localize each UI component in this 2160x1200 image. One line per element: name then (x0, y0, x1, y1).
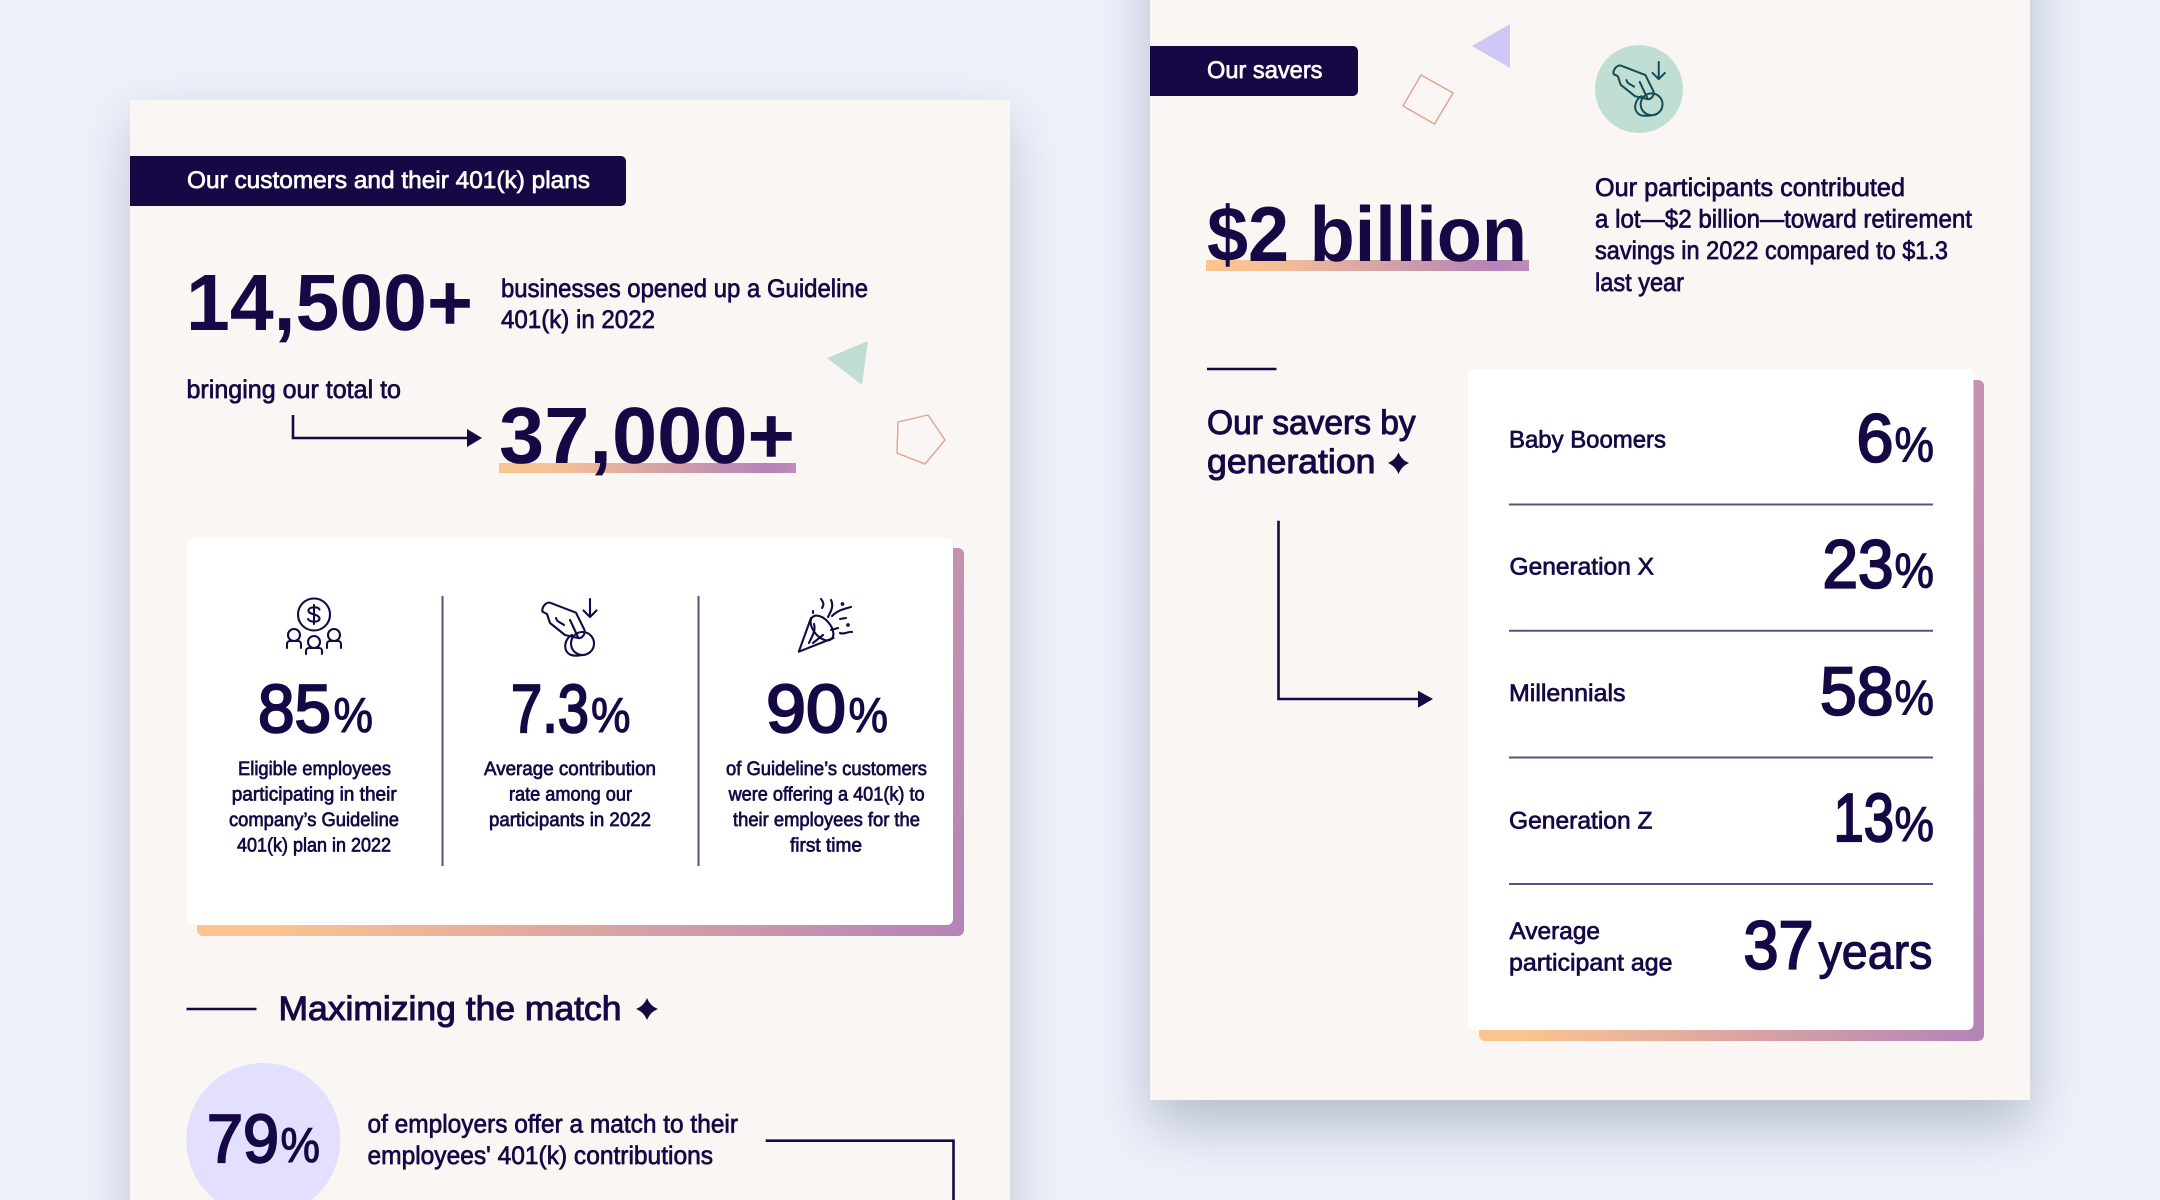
stat column: 90% (726, 599, 927, 857)
stat column: 90%: % (848, 689, 888, 743)
text: participants contributed: a lot—$2 billion—toward retirement (1595, 206, 1972, 234)
row: millennials 58%: 58 (1820, 653, 1894, 729)
row: average participant age 37 years: 37 (1744, 907, 1814, 983)
row: millennials 58% (1509, 653, 1934, 729)
stat: 79% of employers offer a match: of employers offer a match to their (368, 1110, 738, 1138)
section tag: savers (1150, 46, 1358, 96)
heading: our savers by generation (1207, 369, 1416, 481)
row: generation z 13%: Generation Z (1509, 807, 1652, 834)
stat column: 7.3%: participants in 2022 (489, 809, 651, 831)
row: baby boomers 6%: 6 (1856, 401, 1894, 477)
stat: 79% of employers offer a match (186, 1063, 738, 1200)
stat column: 85%: company’s Guideline (229, 809, 399, 831)
stat column: 85%: participating in their (232, 784, 397, 806)
row: millennials 58%: Millennials (1509, 680, 1626, 707)
text: participants contributed: Our participants contributed (1595, 174, 1905, 202)
stat column: 7.3%: 7.3 (511, 671, 589, 747)
heading: maximizing the match (186, 990, 658, 1028)
icon: hand dropping coin (542, 599, 596, 656)
panel: our customers and their 401(k) plans (130, 100, 1010, 1200)
row: baby boomers 6%: Baby Boomers (1509, 427, 1666, 454)
row: generation z 13%: 13 (1834, 780, 1894, 856)
text: participants contributed: savings in 2022 compared to $1.3 (1595, 237, 1948, 265)
stat column: 85%: 401(k) plan in 2022 (237, 835, 391, 857)
row: generation x 23% (1510, 527, 1934, 603)
panel: three key stats card (187, 538, 964, 936)
stat column: 90%: first time (790, 835, 862, 857)
heading: maximizing the match: Maximizing the match (278, 990, 622, 1028)
stat: 14,500+ businesses: businesses opened up a Guideline (501, 275, 868, 303)
section tag: customers (130, 156, 626, 206)
row: baby boomers 6% (1509, 401, 1934, 477)
stat column: 85% (229, 598, 399, 857)
text: bringing our total to: bringing our total to (186, 376, 401, 404)
panel: savers by generation card (1468, 369, 1984, 1041)
row: generation x 23%: % (1894, 545, 1934, 599)
stat column: 85%: Eligible employees (238, 758, 391, 780)
stat column: 7.3%: Average contribution (484, 758, 656, 780)
decoration: outline diamond (1403, 75, 1453, 124)
row: baby boomers 6%: % (1894, 419, 1934, 473)
row: average participant age 37 years: participant age (1509, 950, 1672, 977)
stat column: 7.3%: rate among our (509, 784, 632, 806)
stat column: 7.3% (484, 599, 656, 831)
decoration: outline pentagon (897, 415, 945, 464)
stat column: 90%: 90 (766, 671, 846, 747)
section tag: savers: Our savers (1207, 57, 1322, 84)
icon: people and dollar (287, 598, 341, 654)
stat: 37,000+ with gradient underline: 37,000+ (499, 391, 795, 480)
stat: 79% of employers offer a match: % (280, 1119, 320, 1173)
stat: 14,500+ businesses (186, 258, 868, 347)
stat: 14,500+ businesses: 401(k) in 2022 (501, 306, 655, 334)
row: millennials 58%: % (1894, 671, 1934, 725)
row: generation z 13% (1509, 780, 1934, 856)
text: participants contributed: last year (1595, 269, 1684, 297)
decoration: green triangle (827, 341, 868, 385)
connector line (766, 1141, 954, 1200)
icon: party popper (799, 599, 852, 652)
stat column: 85%: % (334, 689, 373, 743)
stat: $2 billion: $2 billion (1207, 190, 1527, 278)
text: participants contributed (1595, 174, 1972, 297)
row: generation z 13%: % (1894, 798, 1934, 852)
arrow: generation (1278, 521, 1433, 708)
row: generation x 23%: Generation X (1510, 553, 1654, 580)
icon: hand dropping coin in green circle (1595, 45, 1683, 133)
stat column: 90%: were offering a 401(k) to (728, 784, 925, 806)
stat column: 90%: their employees for the (733, 809, 920, 831)
row: generation x 23%: 23 (1822, 527, 1894, 603)
heading: our savers by generation: Our savers by (1207, 404, 1416, 442)
heading: our savers by generation: generation (1207, 443, 1376, 481)
row: average participant age 37 years: Average (1510, 918, 1600, 945)
stat: 14,500+ businesses: 14,500+ (186, 258, 473, 347)
stat column: 90%: of Guideline’s customers (726, 758, 927, 780)
decoration: lilac triangle (1472, 24, 1510, 68)
stat column: 85%: 85 (258, 671, 331, 747)
section tag: customers: Our customers and their 401(k) plans (187, 167, 590, 194)
row: average participant age 37 years (1509, 907, 1932, 983)
stat column: 7.3%: % (591, 689, 630, 743)
panel: our savers (1150, 0, 2030, 1100)
row: average participant age 37 years: years (1818, 925, 1932, 979)
arrow: to total (293, 415, 482, 447)
stat: 79% of employers offer a match: employees' 401(k) contributions (368, 1142, 713, 1170)
stat: 79% of employers offer a match: 79 (207, 1101, 279, 1177)
